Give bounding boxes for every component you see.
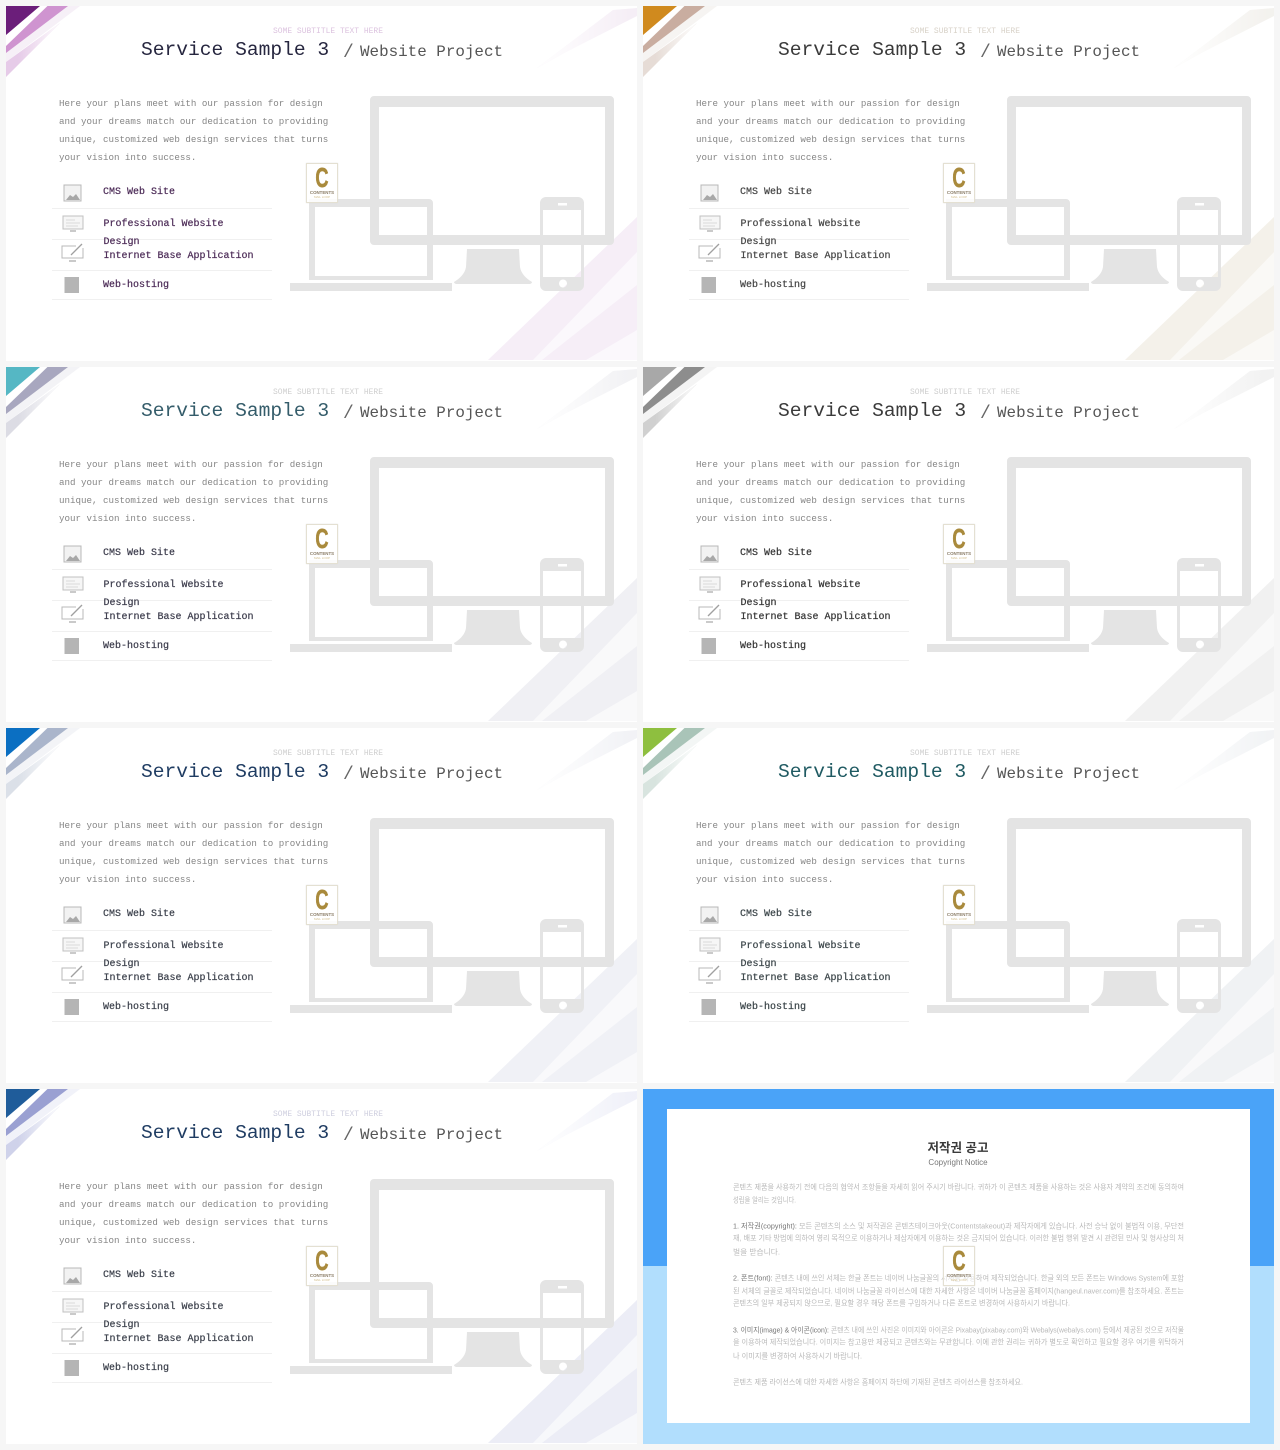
clause 2: font: 콘텐츠의 일부 제공되지 않으므로, 필요할 경우 해당 폰트를 구입하거나 다른 폰트로 변경하여 사용하시기 바랍니다. (733, 1298, 1070, 1308)
logo: C (315, 1245, 329, 1276)
intro paragraph: your vision into success. (59, 874, 196, 884)
service list: Design (104, 598, 140, 609)
service list: Web-hosting (103, 641, 169, 652)
clause 3: image and icon: 3. 이미지(image) & 아이콘(icon): 콘텐츠 내에 쓰인 사진은 이미지와 아이콘은 Pixabay(pixabay.com)와 Webalys(webalys.com) 등에서 제공된 것으로 저작물 (733, 1324, 1184, 1334)
panel: gray service slide (643, 367, 1274, 722)
corner accent: mid band (643, 728, 705, 775)
title suffix: Website Project (997, 404, 1140, 422)
service list: Internet Base Application (104, 973, 254, 984)
service list: Professional Website (104, 580, 224, 591)
intro paragraph: Here your plans meet with our passion for design (59, 1181, 323, 1192)
intro paragraph: unique, customized web design services that turns (59, 134, 328, 144)
intro paragraph: unique, customized web design services that turns (59, 494, 328, 506)
corner accent: light band (643, 745, 697, 799)
clause 1: copyright: 재, 배포 기타 방법에 의하여 영리 목적으로 이용하거나 제삼자에게 이용하는 것은 금지되어 있습니다. 이러한 불법 행위 발견 시 관련된 민사 및 형사상의 처 (733, 1232, 1184, 1242)
corner accent: green triangle (643, 728, 677, 757)
corner accent: light band (6, 384, 60, 438)
intro paragraph: Here your plans meet with our passion for design (696, 98, 960, 109)
intro clause (733, 1182, 1184, 1204)
logo: MAIL LOOP (951, 917, 967, 921)
panel: green service slide (643, 728, 1274, 1083)
title separator: / (980, 43, 991, 63)
corner accent: mid band (6, 6, 68, 53)
panel: copyright notice (643, 1089, 1274, 1444)
logo: MAIL LOOP (314, 1278, 330, 1282)
intro paragraph: and your dreams match our dedication to providing (59, 477, 328, 488)
title: Service Sample 3 (778, 400, 966, 422)
clause 3: image and icon: 나 이미지를 변경하여 사용하시기 바랍니다. (733, 1350, 862, 1360)
logo: MAIL LOOP (951, 1278, 967, 1282)
service list: Internet Base Application (740, 251, 891, 262)
title: Service Sample 3 (141, 761, 329, 783)
clause 3: image and icon: 을 이용하여 제작되었습니다. 이미지는 참고용만 제공되고 콘텐츠와는 무관합니다. 이에 관한 권리는 귀하가 별도로 확인하고 필요할 경우 여기를 위탁하거 (733, 1336, 1184, 1346)
decorative shapes and device illustration (6, 728, 637, 1082)
logo: CONTENTS (947, 1273, 971, 1278)
intro paragraph (696, 98, 965, 162)
intro paragraph: your vision into success. (696, 152, 833, 162)
list icons (699, 185, 720, 293)
service list: Internet Base Application (740, 612, 891, 623)
service list: Web-hosting (740, 1002, 806, 1013)
title separator: / (343, 404, 354, 424)
intro paragraph: unique, customized web design services that turns (59, 856, 328, 866)
notice text (733, 1140, 1184, 1386)
corner accent: navy triangle (6, 1089, 40, 1118)
decorative shapes and device illustration (643, 367, 1274, 721)
logo (306, 885, 338, 925)
subtitle: SOME SUBTITLE TEXT HERE (910, 27, 1020, 36)
list icons (62, 1268, 83, 1376)
logo (306, 1246, 338, 1286)
service list: Design (104, 959, 140, 970)
clause 1: copyright: 벌을 받습니다. (733, 1246, 780, 1256)
logo (943, 524, 975, 564)
service list: Design (740, 237, 777, 248)
intro paragraph (696, 820, 965, 884)
corner accent: light band (6, 1106, 60, 1160)
logo: C (952, 884, 966, 915)
corner accent: mid band (6, 728, 68, 775)
intro paragraph: unique, customized web design services that turns (696, 494, 965, 506)
service list (740, 186, 891, 291)
lower light-blue background band (643, 1266, 1274, 1444)
title: Service Sample 3 (141, 1122, 329, 1144)
intro paragraph: your vision into success. (696, 874, 833, 884)
logo: MAIL LOOP (951, 556, 967, 560)
corner accent: blue triangle (6, 728, 40, 757)
corner accent: light band (6, 745, 60, 799)
title separator: / (343, 1126, 354, 1146)
title: Service Sample 3 (778, 39, 966, 61)
service list: Design (104, 1320, 140, 1331)
clause 2: font (733, 1272, 1184, 1308)
corner accent: light band (643, 384, 697, 438)
title separator: / (343, 765, 354, 785)
logo: MAIL LOOP (314, 556, 330, 560)
title: Service Sample 3 (141, 39, 329, 61)
service list (102, 547, 254, 652)
title suffix: Website Project (997, 42, 1140, 60)
logo: CONTENTS (310, 190, 334, 195)
corner accent: orange triangle (643, 6, 677, 35)
subtitle: SOME SUBTITLE TEXT HERE (273, 27, 383, 36)
intro paragraph: and your dreams match our dedication to providing (696, 116, 965, 127)
device illustration (927, 96, 1251, 291)
logo (943, 163, 975, 203)
logo (306, 163, 338, 203)
service list: CMS Web Site (740, 548, 812, 559)
intro clause: 콘텐츠 제품을 사용하기 전에 다음의 협약서 조항들을 자세히 읽어 주시기 바랍니다. 귀하가 이 콘텐츠 제품을 사용하는 것은 사용자 계약의 조건에 동의하여 (733, 1182, 1184, 1192)
intro paragraph: unique, customized web design services that turns (696, 856, 965, 866)
intro paragraph: and your dreams match our dedication to providing (696, 477, 965, 488)
title separator: / (343, 43, 354, 63)
closing note: 콘텐츠 제품 라이선스에 대한 자세한 사항은 홈페이지 하단에 기재된 콘텐츠 라이선스를 참조하세요. (733, 1376, 1023, 1386)
logo: C (315, 162, 329, 193)
intro clause: 성립을 알리는 것입니다. (733, 1194, 796, 1204)
clause 1: copyright (733, 1220, 1184, 1256)
logo (306, 524, 338, 564)
corner accent: teal triangle (6, 367, 40, 396)
service list: Internet Base Application (104, 612, 254, 623)
service list (102, 1269, 254, 1374)
service list: Web-hosting (740, 641, 806, 652)
subtitle: SOME SUBTITLE TEXT HERE (273, 388, 383, 397)
panel: purple service slide (6, 6, 637, 361)
service list: Web-hosting (740, 280, 806, 291)
service list: CMS Web Site (740, 909, 812, 920)
service list: Professional Website (104, 219, 224, 230)
clause 2: font: 된 서체의 글꼴로 제작되었습니다. 네이버 나눔글꼴 라이선스에 대한 자세한 사항은 네이버 나눔글꼴 홈페이지(hangeul.naver.com)를 참조하세요. 폰트는 (733, 1286, 1184, 1296)
corner accent: mid band (643, 6, 705, 53)
panel: orange service slide (643, 6, 1274, 361)
intro paragraph: your vision into success. (59, 512, 196, 524)
subtitle: SOME SUBTITLE TEXT HERE (910, 749, 1020, 758)
logo: MAIL LOOP (314, 917, 330, 921)
intro paragraph: your vision into success. (59, 152, 196, 162)
notice heading: 저작권 공고 (928, 1140, 988, 1155)
service list: CMS Web Site (103, 548, 175, 559)
service list: CMS Web Site (103, 909, 175, 920)
logo: MAIL LOOP (951, 195, 967, 199)
device illustration (290, 818, 614, 1013)
service list: Web-hosting (103, 280, 169, 291)
logo: C (315, 884, 329, 915)
subtitle: SOME SUBTITLE TEXT HERE (273, 1110, 383, 1119)
list icons (699, 546, 720, 654)
logo: CONTENTS (310, 1273, 334, 1278)
device illustration (290, 457, 614, 652)
logo: C (952, 162, 966, 193)
logo: CONTENTS (310, 551, 334, 556)
title: Service Sample 3 (141, 400, 329, 422)
intro paragraph: Here your plans meet with our passion for design (59, 459, 323, 470)
device illustration (290, 96, 614, 291)
intro paragraph: and your dreams match our dedication to providing (696, 838, 965, 849)
intro paragraph (59, 459, 328, 524)
logo: CONTENTS (947, 190, 971, 195)
logo: C (952, 523, 966, 554)
list icons (62, 907, 83, 1015)
decorative shapes and device illustration (6, 1089, 637, 1443)
corner accent: light band (643, 23, 697, 77)
intro paragraph: and your dreams match our dedication to providing (59, 838, 328, 849)
service list: Professional Website (104, 1302, 224, 1313)
intro paragraph (59, 98, 328, 162)
intro paragraph: Here your plans meet with our passion for design (59, 820, 323, 831)
service list: Design (740, 598, 777, 609)
corner accent: purple triangle (6, 6, 40, 35)
title separator: / (980, 765, 991, 785)
logo: CONTENTS (310, 912, 334, 917)
logo: C (952, 1245, 966, 1276)
service list: Internet Base Application (104, 251, 254, 262)
title suffix: Website Project (360, 764, 503, 782)
clause 2: font: 2. 폰트(font): 콘텐츠 내에 쓰인 서체는 한글 폰트는 네이버 나눔글꼴의 서체를 사용하여 제작되었습니다. 한글 외의 모든 폰트는 Windows System에 포함 (733, 1272, 1184, 1282)
service list: CMS Web Site (103, 187, 175, 198)
service list: Professional Website (740, 580, 861, 591)
title suffix: Website Project (360, 404, 503, 422)
logo: C (315, 523, 329, 554)
panel: navy service slide (6, 1089, 637, 1444)
logo (943, 885, 975, 925)
clause 1: copyright: 1. 저작권(copyright): 모든 콘텐츠의 소스 및 저작권은 콘텐츠테이크아웃(Contentstakeout)과 제작자에게 있습니다. 사전 승낙 없이 불법적 이용, 무단전 (733, 1220, 1184, 1230)
corner accent: mid band (6, 367, 68, 414)
subtitle: SOME SUBTITLE TEXT HERE (910, 388, 1020, 397)
device illustration (290, 1179, 614, 1374)
intro paragraph: Here your plans meet with our passion for design (59, 98, 323, 109)
device illustration (927, 457, 1251, 652)
service list (102, 908, 254, 1013)
logo: MAIL LOOP (314, 195, 330, 199)
corner accent: light band (6, 23, 60, 77)
title suffix: Website Project (360, 42, 503, 60)
title suffix: Website Project (997, 764, 1140, 782)
corner accent: gray triangle (643, 367, 677, 396)
panel: blue service slide (6, 728, 637, 1083)
service list (102, 186, 254, 291)
list icons (699, 907, 720, 1015)
service list (740, 547, 891, 652)
logo: CONTENTS (947, 912, 971, 917)
service list: Professional Website (740, 219, 861, 230)
title separator: / (980, 404, 991, 424)
title suffix: Website Project (360, 1126, 503, 1144)
service list: Web-hosting (103, 1002, 169, 1013)
clause 3: image and icon (733, 1324, 1184, 1360)
decorative shapes and device illustration (643, 728, 1274, 1082)
list icons (62, 185, 83, 293)
service list: Design (740, 959, 777, 970)
corner accent: mid band (643, 367, 705, 414)
logo (943, 1246, 975, 1286)
intro paragraph: your vision into success. (59, 1234, 196, 1246)
list icons (62, 546, 83, 654)
decorative shapes and device illustration (6, 6, 637, 360)
corner accent: mid band (6, 1089, 68, 1136)
service list: CMS Web Site (103, 1270, 175, 1281)
service list: Professional Website (740, 941, 861, 952)
intro paragraph: unique, customized web design services that turns (59, 1216, 328, 1228)
device illustration (927, 818, 1251, 1013)
intro paragraph: Here your plans meet with our passion for design (696, 459, 960, 470)
intro paragraph (59, 1181, 328, 1246)
subtitle: SOME SUBTITLE TEXT HERE (273, 749, 383, 758)
intro paragraph: Here your plans meet with our passion for design (696, 820, 960, 831)
service list: Internet Base Application (104, 1334, 254, 1345)
title: Service Sample 3 (778, 761, 966, 783)
service list: Professional Website (104, 941, 224, 952)
panel: teal service slide (6, 367, 637, 722)
intro paragraph (59, 820, 328, 884)
intro paragraph: your vision into success. (696, 512, 833, 524)
decorative shapes and device illustration (643, 6, 1274, 360)
intro paragraph: and your dreams match our dedication to providing (59, 116, 328, 127)
service list: Design (104, 237, 140, 248)
intro paragraph: unique, customized web design services that turns (696, 134, 965, 144)
service list: Web-hosting (103, 1363, 169, 1374)
intro paragraph (696, 459, 965, 524)
notice sheet (667, 1109, 1250, 1423)
intro paragraph: and your dreams match our dedication to providing (59, 1199, 328, 1210)
decorative shapes and device illustration (6, 367, 637, 721)
service list: Internet Base Application (740, 973, 891, 984)
notice subheading: Copyright Notice (928, 1158, 988, 1167)
logo: CONTENTS (947, 551, 971, 556)
service list (740, 908, 891, 1013)
service list: CMS Web Site (740, 187, 812, 198)
